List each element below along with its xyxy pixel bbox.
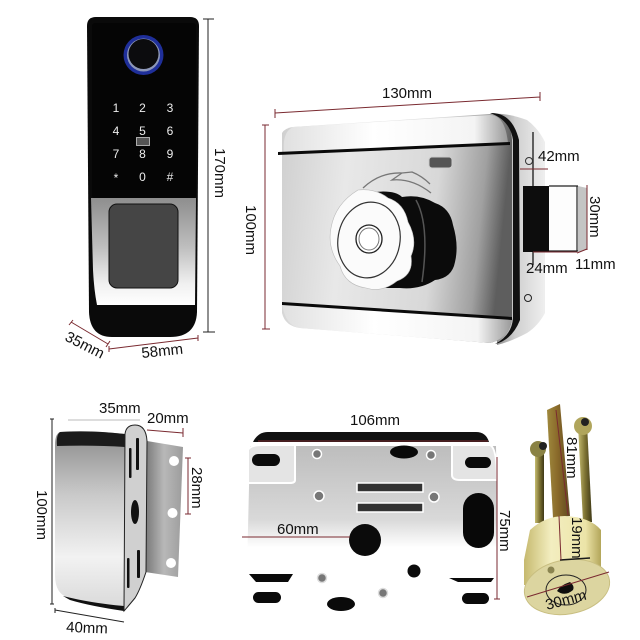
icon: fingerprint sensor ring (124, 35, 164, 75)
knob (330, 190, 457, 289)
keypad digits: 3 (167, 101, 174, 115)
dimension: 30mm cylinder (527, 572, 609, 614)
dimension: 35mm side: 35mm (99, 400, 141, 417)
lock face plate (282, 114, 512, 343)
dimension: 100mm side: 100mm (33, 490, 50, 540)
dimension: 170mm (203, 19, 228, 332)
dimension: 75mm: 75mm (496, 510, 513, 552)
dimension: 100mm lock height: 100mm (242, 205, 259, 255)
dimension: 19mm (559, 516, 585, 560)
screws (312, 450, 439, 598)
dimension: 28mm (185, 458, 205, 514)
bottom highlight strip (282, 303, 512, 343)
dimension: 75mm (494, 457, 513, 599)
keypad digits: * (114, 171, 119, 185)
keypad digits: # (167, 170, 174, 184)
dimension: 60mm (242, 521, 350, 538)
lower slots (249, 574, 494, 611)
upper corner tabs (248, 445, 295, 483)
bottom black groove (282, 302, 512, 320)
panel: keypad unit (87, 17, 199, 337)
dimension: 30mm bolt height (586, 185, 603, 250)
keypad digits: 4 (113, 124, 120, 138)
keypad digits: 5 (139, 124, 146, 138)
dimension: 40mm (55, 608, 124, 637)
dimension: 106mm: 106mm (350, 412, 400, 429)
top black groove (278, 142, 510, 155)
silver lower fascia (91, 198, 196, 305)
tail piece (547, 404, 570, 518)
cylinder barrel (524, 516, 601, 585)
keypad digits: 2 (139, 101, 146, 115)
keypad digits: 8 (139, 147, 146, 161)
keypad digits: 6 (167, 124, 174, 138)
dimension: 20mm (147, 410, 189, 437)
long slot (463, 493, 494, 548)
right black edge (490, 113, 520, 344)
dimension: 11mm: 11mm (575, 256, 616, 273)
cylinder face (520, 553, 614, 621)
dimension: 100mm side (33, 419, 54, 604)
dimension: 100mm lock height (242, 125, 270, 329)
dimension: 35mm side (68, 400, 141, 420)
dimension: 28mm: 28mm (188, 467, 205, 509)
dimension: 40mm: 40mm (66, 619, 108, 637)
deadbolt (523, 186, 587, 252)
center rack slots (357, 483, 423, 512)
dimension: 30mm cylinder: 30mm (544, 587, 588, 614)
plate body (247, 446, 498, 610)
housing top shadow (57, 431, 125, 447)
keypad digits: 0 (139, 170, 146, 184)
top slots (252, 446, 491, 468)
dimension: 19mm: 19mm (568, 517, 585, 559)
lock side edge (490, 114, 545, 345)
icon: keyway (557, 582, 574, 594)
small hole (408, 564, 420, 578)
keypad digits (113, 101, 174, 185)
panel: brass lock cylinder (520, 404, 614, 621)
top highlight strip (284, 115, 508, 153)
dimension: 170mm: 170mm (211, 148, 228, 198)
side screws (526, 158, 532, 164)
dimension: 81mm: 81mm (563, 437, 580, 479)
black touch screen (92, 23, 196, 198)
dimension: 20mm: 20mm (147, 410, 189, 427)
dimension: 60mm: 60mm (277, 521, 319, 538)
keypad body (87, 17, 199, 337)
dimension: 130mm (275, 85, 540, 118)
card reader pad (109, 204, 178, 288)
dimension: 24mm (526, 252, 577, 277)
center keyhole (349, 524, 381, 556)
dimension: 35mm keypad depth: 35mm (62, 328, 107, 362)
flange holes (166, 456, 179, 568)
panel: back plate (247, 432, 498, 611)
keypad digits: 1 (113, 101, 120, 115)
panel: lock side view (55, 425, 183, 611)
dimension: 30mm bolt height: 30mm (586, 196, 603, 238)
dimension: 42mm: 42mm (538, 148, 580, 165)
keypad digits: 7 (113, 147, 120, 161)
top black rim (253, 432, 489, 442)
icon: rotation arrow (363, 172, 431, 193)
panel: lock front view (278, 113, 587, 345)
dimension: 58mm (109, 335, 198, 362)
housing bottom shadow (63, 596, 124, 611)
long screw left (530, 441, 547, 523)
mounting flange (145, 441, 183, 577)
dimension: 42mm (520, 148, 580, 169)
icon: card symbol (136, 138, 150, 146)
dimension: 24mm: 24mm (526, 260, 568, 277)
dimension: 58mm: 58mm (141, 341, 184, 362)
dimension: 81mm (556, 410, 580, 515)
housing side plate (124, 425, 147, 611)
keypad digits: 9 (167, 147, 174, 161)
side plate slots (127, 438, 140, 588)
lock housing (55, 431, 125, 611)
long screw right (574, 417, 592, 522)
dimension: 130mm: 130mm (382, 85, 432, 102)
brand badge (429, 157, 452, 168)
